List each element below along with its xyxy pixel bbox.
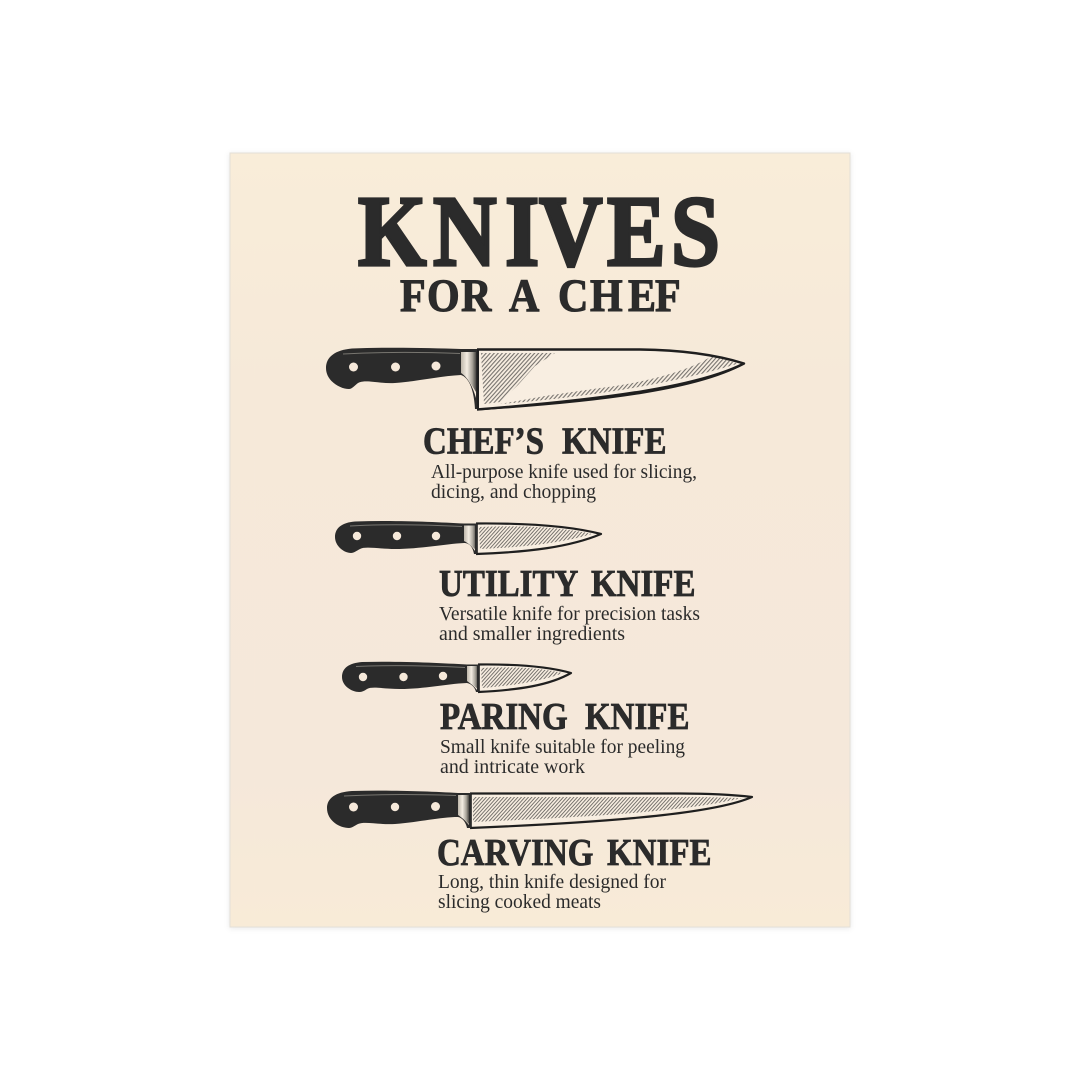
utility knife label xyxy=(439,562,700,645)
title: FOR A CHEF xyxy=(400,270,681,321)
chef's knife label: All-purpose knife used for slicing, xyxy=(431,462,697,483)
icon: carving knife xyxy=(327,791,752,828)
paring knife label xyxy=(440,695,689,778)
utility knife label: KNIFE xyxy=(591,562,695,605)
chef's knife label: dicing, and chopping xyxy=(431,482,596,503)
utility knife label: UTILITY xyxy=(439,562,585,605)
carving knife label xyxy=(437,831,711,913)
carving knife label: CARVING xyxy=(437,831,602,874)
poster background xyxy=(230,153,850,927)
carving knife label: slicing cooked meats xyxy=(438,892,601,913)
paring knife label: PARING xyxy=(440,695,576,738)
paring knife label: and intricate work xyxy=(440,757,585,778)
chef's knife label xyxy=(423,419,697,503)
title: KNIVES xyxy=(358,177,720,287)
utility knife label: and smaller ingredients xyxy=(439,624,625,645)
paring knife label: KNIFE xyxy=(585,695,689,738)
carving knife label: KNIFE xyxy=(607,831,711,874)
utility knife label: Versatile knife for precision tasks xyxy=(439,604,700,625)
icon: chef's knife xyxy=(326,348,744,410)
carving knife label: Long, thin knife designed for xyxy=(438,872,666,893)
paring knife label: Small knife suitable for peeling xyxy=(440,737,685,758)
chef's knife label: CHEF’S xyxy=(423,419,552,462)
chef's knife label: KNIFE xyxy=(562,419,666,462)
icon: utility knife xyxy=(335,521,601,554)
icon: paring knife xyxy=(342,662,571,692)
